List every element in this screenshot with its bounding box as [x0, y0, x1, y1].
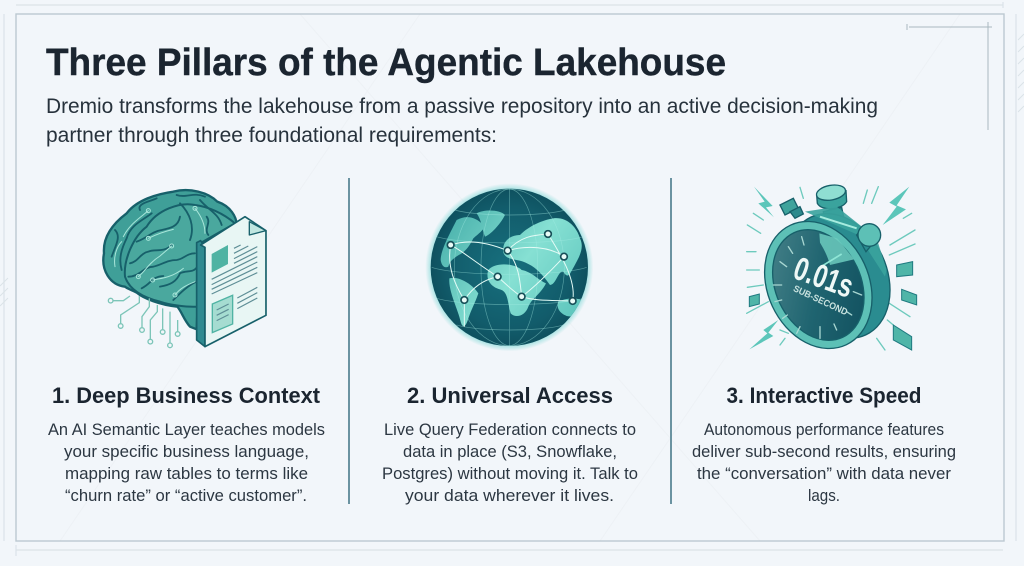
- column 3: heading: 3. Interactive Speed: [726, 383, 922, 408]
- column 2: body text: data in place (S3, Snowflake,: [403, 443, 617, 461]
- column 2: body text: Live Query Federation connects to: [384, 421, 636, 439]
- column 2: heading: 2. Universal Access: [407, 383, 613, 408]
- icon: stopwatch: SUB-SECOND: [792, 283, 849, 317]
- column 1: body text: “churn rate” or “active customer”.: [65, 487, 307, 505]
- column 1: body text: [48, 421, 325, 505]
- column 2: body text: Postgres) without moving it. Talk to: [382, 465, 638, 483]
- column 1: body text: An AI Semantic Layer teaches models: [48, 421, 325, 439]
- intro text: partner through three foundational requirements:: [46, 123, 497, 147]
- intro text: [46, 94, 878, 147]
- column 3: body text: [692, 421, 956, 505]
- icon: globe network: [425, 183, 593, 351]
- icon: brain with document: [103, 190, 266, 348]
- column 3: body text: lags.: [808, 487, 840, 505]
- divider: [670, 178, 672, 504]
- column 2: body text: your data wherever it lives.: [405, 487, 614, 505]
- icon: stopwatch: [745, 183, 917, 366]
- title: Three Pillars of the Agentic Lakehouse: [46, 42, 726, 84]
- icon: stopwatch: 0.01s: [789, 249, 859, 305]
- intro text: Dremio transforms the lakehouse from a passive repository into an active decision-making: [46, 94, 878, 118]
- column 2: body text: [382, 421, 638, 505]
- column 1: body text: your specific business language,: [64, 443, 309, 461]
- divider: [348, 178, 350, 504]
- column 3: body text: the “conversation” with data never: [697, 465, 952, 483]
- column 1: body text: mapping raw tables to terms like: [65, 465, 308, 483]
- column 3: body text: Autonomous performance features: [704, 421, 944, 439]
- column 1: heading: 1. Deep Business Context: [52, 383, 321, 408]
- column 3: body text: deliver sub-second results, ensuring: [692, 443, 956, 461]
